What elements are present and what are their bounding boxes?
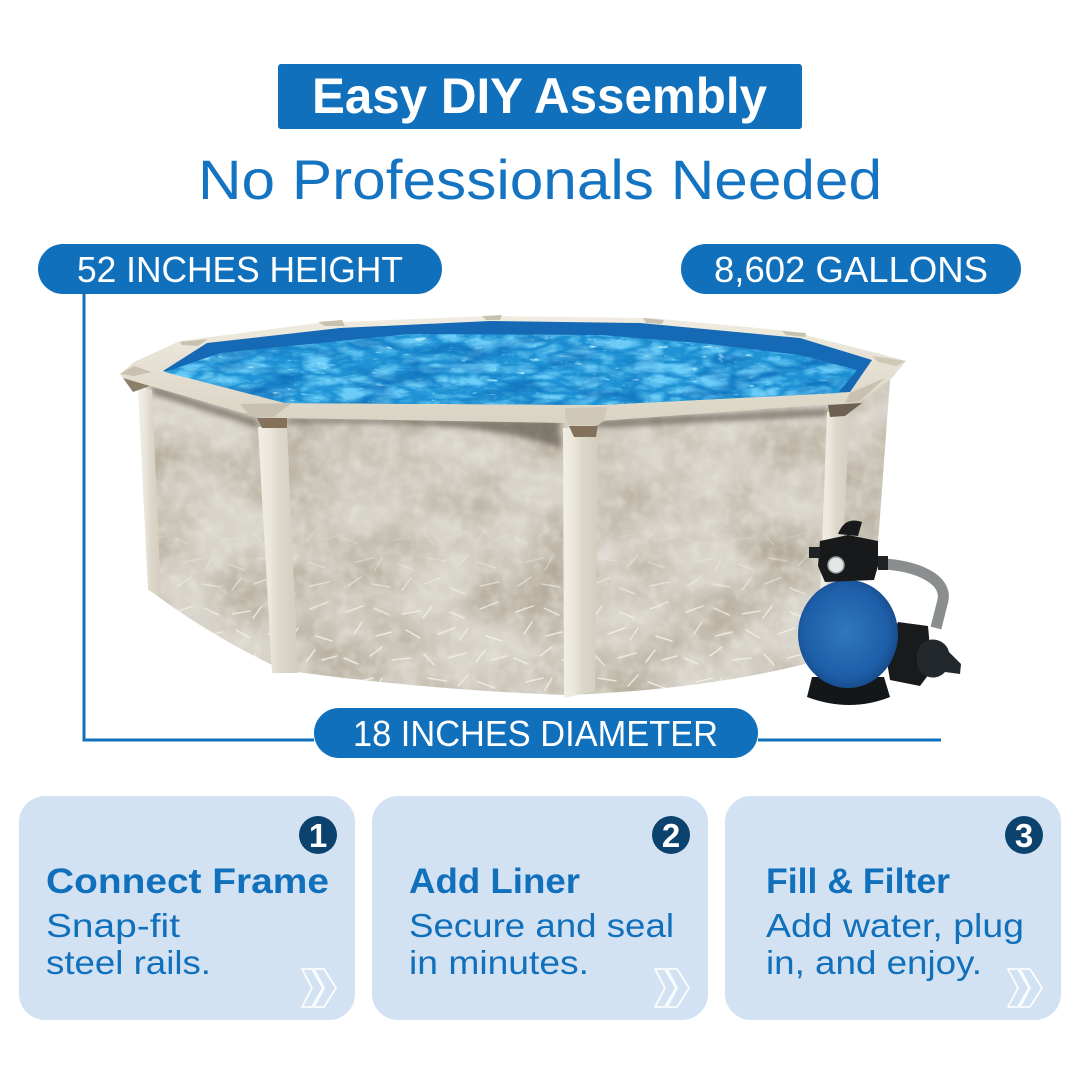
pill: gallons xyxy=(681,244,1021,294)
card 1: Connect Frame xyxy=(19,796,355,1020)
card 2: Add Liner xyxy=(372,796,708,1020)
heading: Fill & Filter xyxy=(766,862,950,901)
step number 1 xyxy=(299,816,337,854)
filter tank xyxy=(798,580,898,688)
wall posts xyxy=(138,388,850,698)
description: Add water, plug xyxy=(766,907,1024,944)
shadow under rim xyxy=(152,385,828,448)
description: Snap-fit xyxy=(46,907,180,944)
rim connectors xyxy=(120,315,906,437)
icon: chevrons xyxy=(302,969,336,1007)
valve head xyxy=(818,535,878,582)
heading: Connect Frame xyxy=(46,862,329,901)
dimension bracket lines xyxy=(84,294,941,740)
pool liner xyxy=(163,321,872,405)
icon: chevrons xyxy=(655,969,689,1007)
top rim xyxy=(120,316,906,423)
icon: chevrons xyxy=(1008,969,1042,1007)
pressure gauge xyxy=(828,557,844,573)
description: steel rails. xyxy=(46,944,211,981)
pump and sand filter xyxy=(798,520,961,705)
pool wall xyxy=(145,380,890,695)
description xyxy=(409,907,674,981)
pump volute and outlet xyxy=(917,640,961,677)
pill: diameter: 18 INCHES DIAMETER xyxy=(353,713,718,754)
description: in, and enjoy. xyxy=(766,944,982,981)
subtitle: No Professionals Needed xyxy=(198,148,882,211)
filter base xyxy=(807,677,890,705)
step number 3: 3 xyxy=(1015,817,1033,854)
step number 1: 1 xyxy=(309,817,327,854)
description xyxy=(46,907,211,981)
pill: height xyxy=(38,244,442,294)
description xyxy=(766,907,1024,981)
hose xyxy=(884,564,943,628)
description: Secure and seal xyxy=(409,907,674,944)
card 3: Fill & Filter xyxy=(725,796,1061,1020)
title banner: Easy DIY Assembly: Easy DIY Assembly xyxy=(312,68,767,124)
water surface xyxy=(165,334,857,405)
step number 2: 2 xyxy=(662,817,680,854)
wall emboss pattern xyxy=(158,532,831,691)
above-ground pool illustration xyxy=(120,315,906,698)
step number 3 xyxy=(1005,816,1043,854)
description: in minutes. xyxy=(409,944,589,981)
heading: Add Liner xyxy=(409,862,580,901)
step number 2 xyxy=(652,816,690,854)
pill: height: 52 INCHES HEIGHT xyxy=(77,249,403,290)
pump motor xyxy=(885,622,932,686)
pill: gallons: 8,602 GALLONS xyxy=(714,249,988,290)
